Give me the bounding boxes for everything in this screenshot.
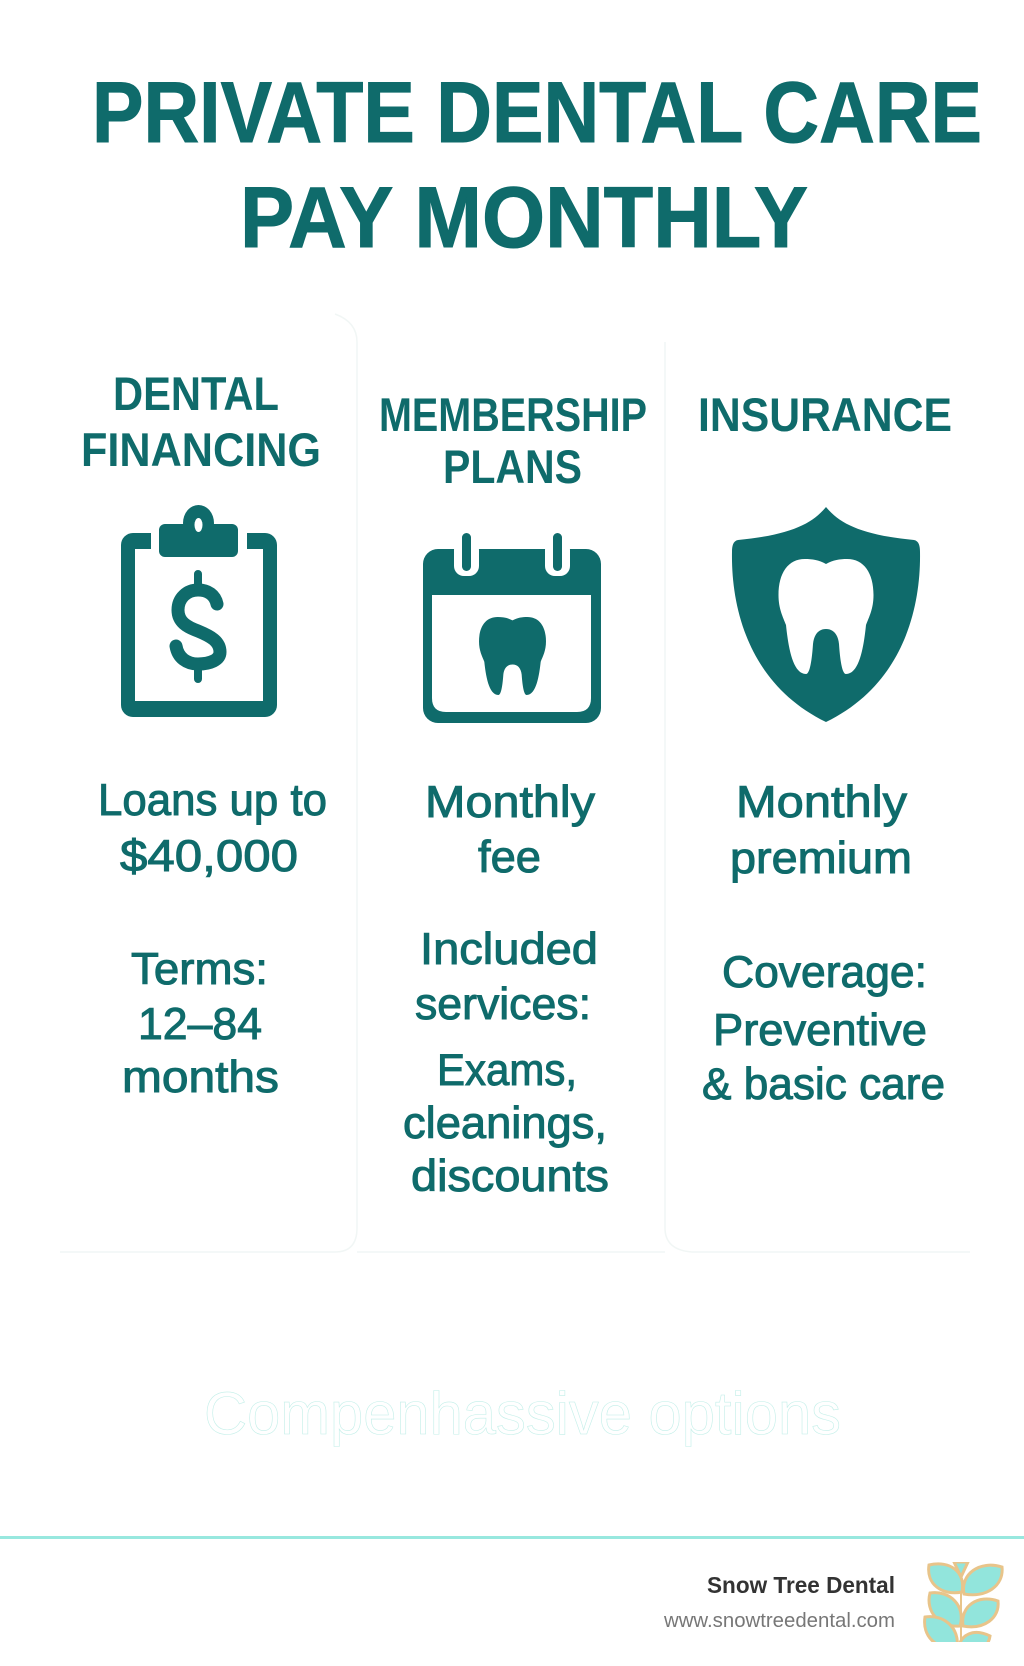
text: monthly premium: premium: [730, 834, 912, 883]
text: loan terms: months: [122, 1053, 279, 1102]
footer brand text: www.snowtreedental.com: [663, 1610, 895, 1632]
heading: dental financing: [81, 367, 321, 476]
text: monthly premium: Monthly: [736, 778, 908, 827]
icon: leaf logo: [925, 1562, 1002, 1651]
icon: clipboard with dollar sign: [121, 505, 277, 717]
text: included services: discounts: [411, 1152, 609, 1201]
footer brand text: [663, 1572, 895, 1632]
text: included services: [403, 925, 609, 1201]
text: monthly fee: fee: [478, 833, 541, 882]
text: loan amount: $40,000: [120, 832, 298, 881]
text: included services: Exams,: [437, 1046, 577, 1095]
text: included services: cleanings,: [403, 1099, 607, 1148]
text: loan terms: [122, 945, 279, 1102]
text: monthly fee: [425, 778, 596, 882]
text: loan amount: [98, 776, 327, 881]
text: coverage: [702, 948, 945, 1109]
text: coverage: & basic care: [702, 1060, 945, 1109]
text: coverage: Coverage:: [722, 948, 927, 997]
text: coverage: Preventive: [713, 1006, 927, 1055]
outlined tagline: Compenhassive options: [204, 1380, 841, 1447]
text: included services: Included: [420, 925, 598, 974]
text: included services: services:: [415, 980, 591, 1029]
icon: shield with tooth: [732, 507, 920, 722]
text: loan amount: Loans up to: [98, 776, 327, 825]
text: monthly premium: [730, 778, 912, 883]
panel: insurance: [665, 342, 970, 1252]
heading: insurance: INSURANCE: [698, 388, 952, 441]
heading: membership plans: [379, 388, 647, 493]
heading: dental financing: FINANCING: [81, 423, 321, 476]
heading: membership plans: MEMBERSHIP: [379, 388, 647, 441]
panel: membership plans: [357, 388, 665, 1252]
text: loan terms: Terms:: [131, 945, 268, 994]
title: [92, 65, 982, 266]
heading: membership plans: PLANS: [443, 440, 582, 493]
title: PAY MONTHLY: [240, 170, 808, 266]
text: monthly fee: Monthly: [425, 778, 596, 827]
footer brand text: Snow Tree Dental: [707, 1572, 895, 1598]
footer rule: [0, 1536, 1024, 1539]
icon: calendar with tooth: [423, 533, 601, 723]
panel: dental financing: [60, 314, 357, 1252]
text: loan terms: 12–84: [138, 1000, 262, 1049]
heading: dental financing: DENTAL: [113, 367, 279, 420]
